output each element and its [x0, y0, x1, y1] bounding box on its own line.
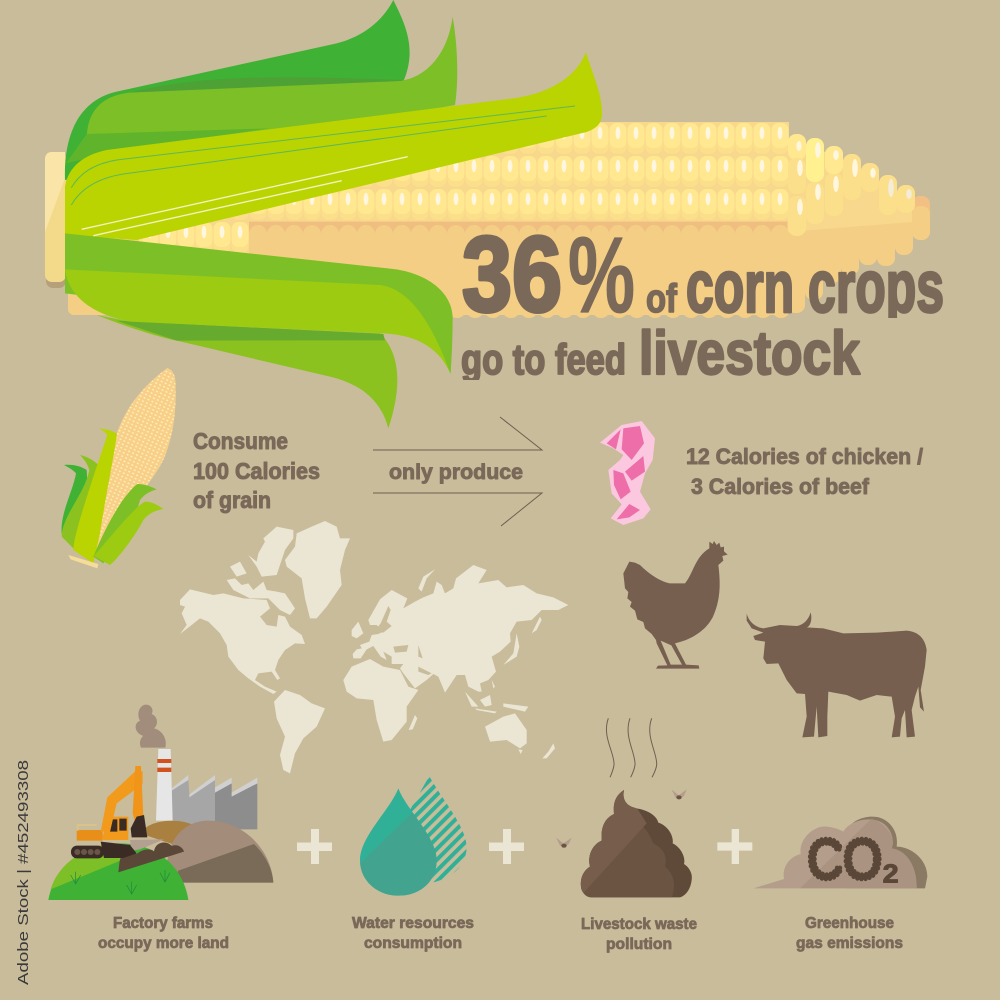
icon: meat: [600, 421, 655, 525]
husk leaf: dark green: [65, 0, 410, 180]
green hill: [48, 843, 188, 900]
smoke: [136, 705, 166, 748]
caption: greenhouse gas: [796, 915, 903, 952]
husk leaf shadow: [117, 321, 385, 341]
headline: %: [568, 214, 635, 335]
icon: manure with flies: [556, 718, 927, 910]
husk leaf: lower lime: [65, 269, 451, 374]
North America: [180, 589, 305, 694]
label: only produce: only produce: [389, 461, 523, 484]
text: consume 100 calories: 100 Calories: [193, 458, 320, 484]
caption: water resources: Water resources: [352, 915, 474, 932]
caption: livestock waste: [581, 916, 697, 953]
Australia and New Zealand: [485, 713, 555, 758]
cob body: [68, 142, 930, 318]
icon: CO2 cloud: CO: [807, 829, 882, 892]
stock id strip: Adobe Stock | #452493308: [15, 760, 32, 985]
icon: water drops: [360, 777, 466, 896]
hatched drop: [410, 777, 466, 882]
icon: CO2 cloud: 2: [883, 858, 899, 888]
dirt pile: [118, 843, 184, 872]
headline: 36: [462, 214, 562, 334]
icon: factory farm scene: [48, 705, 273, 900]
caption: livestock waste: Livestock waste: [581, 916, 697, 933]
husk leaf: lower mid green: [65, 233, 453, 374]
Eurasia inner seas: [375, 606, 432, 675]
arrow top: [373, 417, 542, 450]
icon: small corn cob: [62, 368, 176, 568]
factory building: [172, 775, 257, 829]
flies: [556, 789, 687, 848]
icon: plus three: [717, 829, 752, 864]
Islands: [352, 569, 542, 713]
corn husk leaves: [65, 0, 602, 428]
icon: cow silhouette: [747, 612, 927, 737]
large corn cob illustration: [45, 0, 930, 428]
corn stalk end: [45, 152, 66, 288]
Africa: [343, 659, 418, 742]
text: 12 calories of chicken, 3 calories of beef: [686, 444, 923, 499]
chimney: [156, 749, 173, 821]
world map: [180, 521, 568, 773]
caption: factory farms: occupy more land: [98, 935, 229, 952]
text: consume 100 calories: [193, 428, 320, 513]
caption: livestock waste: pollution: [606, 936, 672, 953]
brown hills: [140, 821, 273, 883]
headline: of: [646, 277, 678, 321]
South America: [274, 690, 325, 773]
icon: CO2 cloud: [753, 817, 927, 892]
front drop: [360, 788, 437, 896]
caption: greenhouse gas: Greenhouse: [805, 915, 894, 932]
caption: factory farms: Factory farms: [113, 915, 213, 932]
headline: go to feed: [461, 336, 626, 384]
text: 12 calories of chicken, 3 calories of beef: 12 Calories of chicken /: [686, 444, 923, 469]
arrow bottom: [373, 493, 542, 526]
icon: plus one: [297, 829, 332, 864]
headline: livestock: [639, 319, 860, 387]
headline: [462, 234, 943, 380]
corn kernels: [139, 122, 915, 254]
husk leaf: lime with vein lines: [65, 52, 602, 240]
text: 12 calories of chicken, 3 calories of beef: 3 Calories of beef: [691, 474, 870, 499]
arrows: only produce: [373, 417, 542, 526]
caption: factory farms: [98, 915, 229, 952]
Canadian Arctic islands: [227, 527, 295, 615]
icon: plus two: [489, 829, 524, 864]
Eurasia: [353, 565, 568, 693]
husk leaf: mid green: [66, 17, 457, 163]
text: consume 100 calories: Consume: [193, 428, 288, 454]
drop tint: [360, 812, 436, 896]
caption: water resources: [352, 915, 474, 952]
caption: greenhouse gas: gas emissions: [796, 935, 903, 952]
blade: [130, 839, 164, 851]
husk leaf: lowest: [97, 315, 397, 428]
text: consume 100 calories: of grain: [193, 487, 271, 513]
icon: chicken silhouette: [623, 541, 728, 669]
caption: water resources: consumption: [364, 935, 462, 952]
Greenland: [285, 521, 350, 618]
Madagascar: [409, 715, 417, 730]
excavator: [71, 766, 147, 858]
manure pile: [580, 790, 692, 898]
stink lines: [606, 718, 657, 777]
